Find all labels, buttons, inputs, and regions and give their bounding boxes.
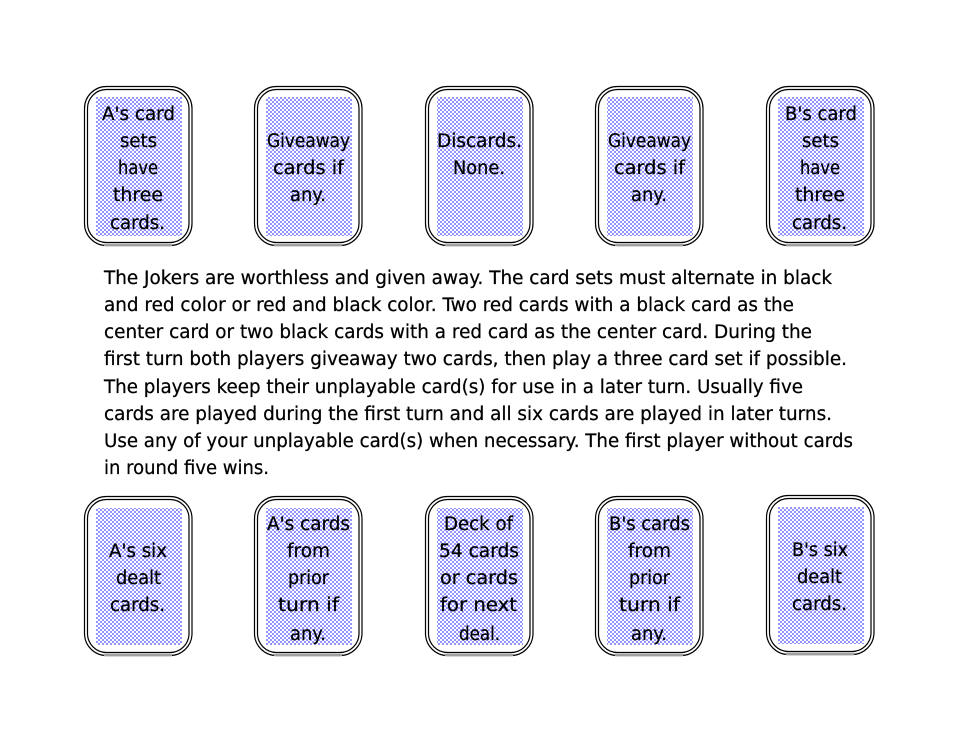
- rules text block: The players keep their unplayable card(s) for use in a later turn. Usually five: [103, 377, 803, 398]
- card: B's giveaway: Giveaway: [608, 131, 691, 152]
- rules text block: The Jokers are worthless and given away. The card sets must alternate in black: [103, 268, 832, 289]
- rules text block: center card or two black cards with a red card as the center card. During the: [104, 322, 812, 343]
- card: A's giveaway: [254, 86, 362, 246]
- card: B's six dealt cards: B's six: [792, 540, 848, 561]
- card: A's giveaway: cards if: [273, 158, 344, 179]
- card: discards: Discards.: [437, 131, 522, 152]
- rules text block: [103, 268, 853, 479]
- card: A's card sets: have: [118, 158, 158, 179]
- rules text block: cards are played during the first turn and all six cards are played in later turns.: [104, 404, 832, 425]
- card: B's giveaway: any.: [631, 185, 667, 206]
- card: A's card sets: three: [113, 185, 163, 206]
- card: A's cards from prior turn: turn if: [278, 595, 340, 616]
- card: B's cards from prior turn: prior: [629, 568, 670, 589]
- card: A's cards from prior turn: any.: [290, 624, 326, 645]
- card: B's cards from prior turn: any.: [631, 624, 667, 645]
- card: B's cards from prior turn: B's cards: [609, 514, 690, 535]
- card: A's cards from prior turn: prior: [288, 568, 329, 589]
- card: A's six dealt cards: dealt: [116, 568, 161, 589]
- card: B's card sets: have: [800, 158, 840, 179]
- card: deck of 54 cards: deal.: [459, 624, 500, 645]
- rules text block: and red color or red and black color. Two red cards with a black card as the: [104, 295, 794, 316]
- card: B's card sets: cards.: [792, 213, 847, 234]
- card: A's card sets: [84, 86, 192, 246]
- card: B's cards from prior turn: from: [628, 541, 671, 562]
- card: A's giveaway: Giveaway: [267, 131, 350, 152]
- rules text block: Use any of your unplayable card(s) when necessary. The first player without cards: [104, 431, 853, 452]
- card: deck of 54 cards: for next: [440, 595, 517, 616]
- card: B's giveaway: cards if: [614, 158, 685, 179]
- card: A's cards from prior turn: [254, 496, 362, 656]
- card: discards: [426, 86, 533, 246]
- card: discards: None.: [453, 158, 505, 179]
- card: A's cards from prior turn: from: [287, 541, 330, 562]
- card: B's six dealt cards: [766, 496, 874, 654]
- card: B's card sets: three: [795, 185, 845, 206]
- card: B's six dealt cards: dealt: [797, 567, 842, 588]
- card: deck of 54 cards: or cards: [440, 568, 518, 589]
- card: A's card sets: A's card: [102, 104, 175, 125]
- card: B's cards from prior turn: turn if: [619, 595, 681, 616]
- card: A's card sets: sets: [120, 131, 157, 152]
- card: A's six dealt cards: A's six: [109, 541, 167, 562]
- card: A's six dealt cards: [84, 496, 192, 656]
- card: deck of 54 cards: 54 cards: [439, 541, 519, 562]
- rules text block: first turn both players giveaway two cards, then play a three card set if possible.: [104, 349, 847, 370]
- card: B's giveaway: [596, 86, 703, 246]
- card: A's cards from prior turn: A's cards: [267, 514, 350, 535]
- card: A's six dealt cards: cards.: [110, 595, 165, 616]
- card: B's card sets: [766, 86, 874, 246]
- card: deck of 54 cards: Deck of: [444, 514, 513, 535]
- card: A's giveaway: any.: [290, 185, 326, 206]
- card: B's card sets: B's card: [785, 104, 857, 125]
- card: B's card sets: sets: [802, 131, 839, 152]
- rules text block: in round five wins.: [104, 458, 269, 479]
- card: B's cards from prior turn: [596, 496, 703, 656]
- card: A's card sets: cards.: [110, 213, 165, 234]
- card: deck of 54 cards: [426, 496, 533, 656]
- card: B's six dealt cards: cards.: [792, 594, 847, 615]
